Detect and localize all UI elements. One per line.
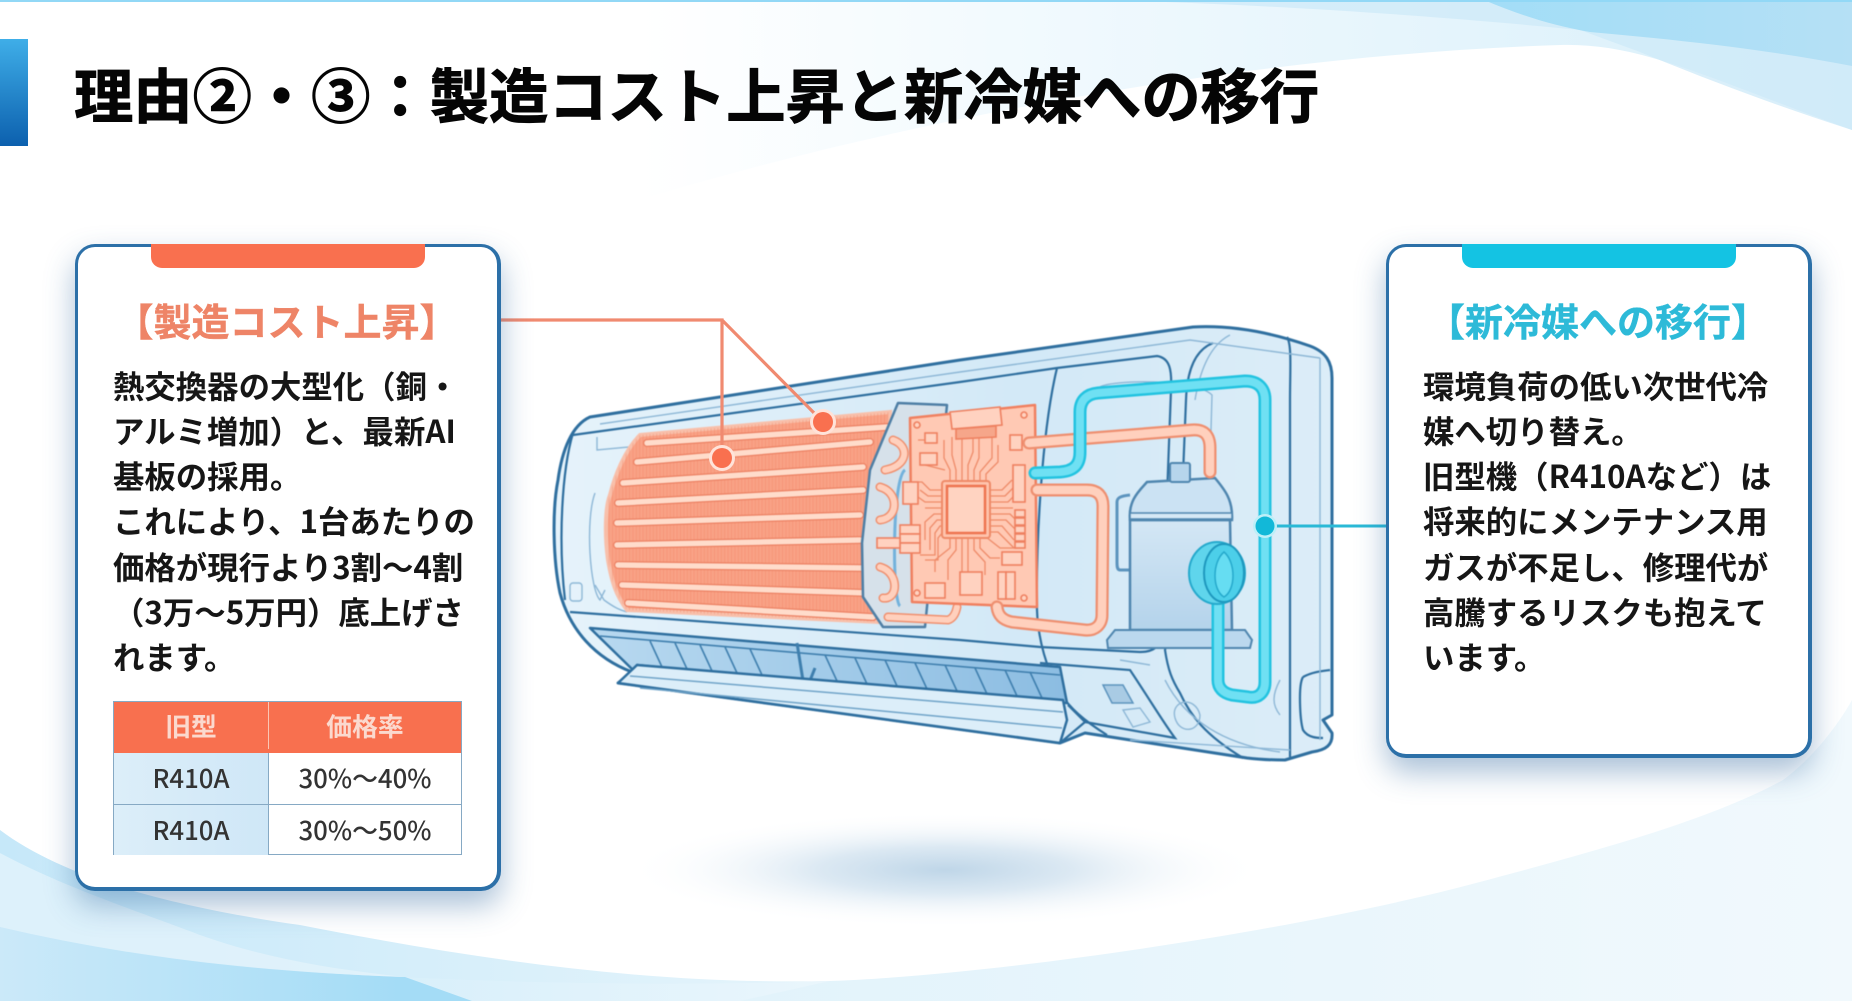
text: new refrigerant explanation: 媒へ切り替え。 — [1423, 408, 1643, 453]
text: new refrigerant explanation: 高騰するリスクも抱えて — [1423, 589, 1767, 634]
accent bar — [0, 39, 28, 146]
table row 1: R410A — [152, 759, 230, 796]
cyan refrigerant pipe — [1035, 381, 1265, 697]
compressor — [1107, 463, 1252, 648]
table: price rate — [113, 701, 462, 855]
processor chip — [942, 481, 990, 538]
text: manufacturing cost explanation: （3万〜5万円）底上げさ — [113, 589, 464, 634]
AI circuit board — [877, 405, 1037, 607]
text: manufacturing cost explanation: 価格が現行より3割〜4割 — [113, 544, 463, 589]
text: manufacturing cost explanation: これにより、1台あたりの — [113, 498, 475, 543]
table row 2: R410A — [152, 811, 230, 848]
table header: 価格率 — [326, 707, 404, 744]
text: manufacturing cost explanation: アルミ増加）と、最新AI — [113, 408, 456, 453]
text: new refrigerant explanation: います。 — [1423, 634, 1545, 679]
shell thin detail lines — [570, 335, 1320, 752]
text: manufacturing cost explanation: れます。 — [113, 634, 235, 679]
front louver flap — [618, 665, 1067, 743]
display panel window — [1103, 685, 1133, 703]
cyan panel tab — [1462, 244, 1736, 268]
text: new refrigerant explanation: 将来的にメンテナンス用 — [1423, 498, 1768, 543]
shell contour lines — [562, 337, 1330, 758]
orange panel tab — [151, 244, 425, 268]
orange refrigerant pipes — [997, 430, 1210, 630]
text: manufacturing cost explanation — [113, 362, 475, 679]
heading: manufacturing cost: 【製造コスト上昇】 — [115, 292, 458, 347]
table header: 旧型 — [165, 707, 217, 744]
table row 1 — [114, 753, 432, 804]
heat exchanger coil — [606, 412, 890, 622]
panel: new refrigerant transition — [1366, 238, 1832, 792]
text: new refrigerant explanation: 環境負荷の低い次世代冷 — [1423, 362, 1768, 408]
heading: new refrigerant: 【新冷媒への移行】 — [1427, 292, 1769, 347]
panel: manufacturing cost increase — [56, 238, 520, 924]
unit body shell — [554, 327, 1332, 760]
end plate with return bends — [862, 403, 957, 627]
table row 2: 30%〜50% — [298, 811, 432, 848]
text: new refrigerant explanation — [1423, 362, 1771, 679]
table row 1: 30%〜40% — [298, 759, 432, 796]
text: new refrigerant explanation: 旧型機（R410Aなど）は — [1423, 453, 1771, 498]
table header — [114, 702, 461, 753]
text: manufacturing cost explanation: 熱交換器の大型化（銅・ — [113, 362, 458, 408]
text: manufacturing cost explanation: 基板の採用。 — [113, 453, 301, 498]
title: 理由②・③：製造コスト上昇と新冷媒への移行 — [74, 50, 1319, 136]
table row 2 — [114, 804, 461, 855]
board components — [877, 407, 1027, 601]
air vents — [590, 628, 1067, 703]
compressor motor housing — [1189, 542, 1245, 604]
text: new refrigerant explanation: ガスが不足し、修理代が — [1423, 544, 1768, 589]
